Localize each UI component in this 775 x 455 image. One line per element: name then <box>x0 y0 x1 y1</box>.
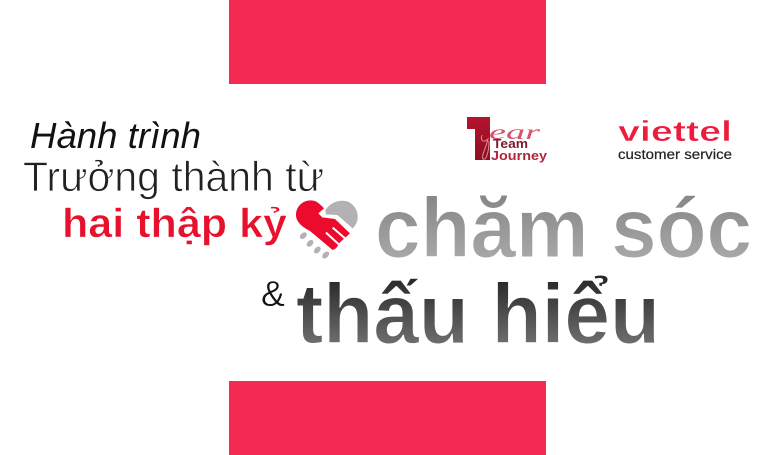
numeral 1 <box>467 117 490 160</box>
heading: thấu hiểu: thấu hiểu <box>296 267 660 361</box>
red half of the heart <box>296 200 350 250</box>
heading: chăm sóc: chăm sóc <box>375 181 752 275</box>
Team: Team <box>493 136 528 151</box>
logo: viettel customer service <box>618 116 732 162</box>
logo: 1 year team journey <box>467 117 548 163</box>
finger gaps <box>326 228 347 246</box>
script loop of the y <box>481 135 489 159</box>
icon: handshake heart <box>296 200 358 260</box>
bottom red block <box>229 381 546 455</box>
heading: hai thập kỷ: hai thập kỷ <box>62 200 287 246</box>
heading: Hành trình: Hành trình <box>30 115 201 156</box>
script: year: ear <box>489 122 540 144</box>
ampersand: & <box>261 273 285 314</box>
grey half of the heart <box>325 201 358 228</box>
top red block <box>229 0 546 84</box>
Journey: Journey <box>491 148 548 163</box>
viettel wordmark: viettel <box>618 116 732 148</box>
heading: Trưởng thành từ: Trưởng thành từ <box>23 153 324 200</box>
grey finger dots <box>299 231 330 260</box>
customer service: customer service <box>618 147 732 162</box>
